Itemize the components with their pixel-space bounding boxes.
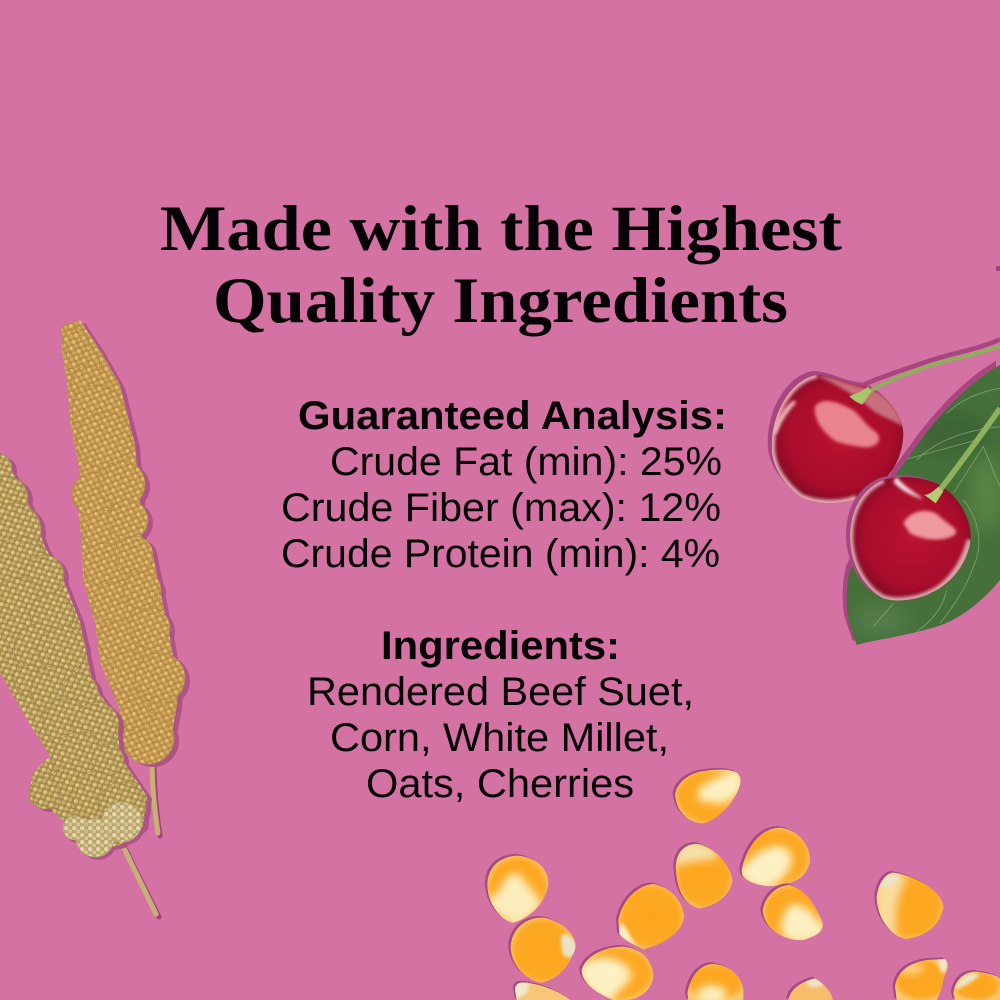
text block: ingredients: Corn, White Millet, [330,716,669,760]
text block: guaranteed analysis: Crude Fat (min): 25% [330,440,722,484]
kernel 14 [513,981,570,1000]
text block: ingredients: Rendered Beef Suet, [307,670,694,714]
image: millet sprays [0,320,190,917]
kernel 5 [616,882,684,949]
image: cherries and leaf [768,339,1000,645]
text block: ingredients: Oats, Cherries [366,762,634,806]
image: corn kernels [485,768,1000,1000]
kernel 2 [485,854,548,927]
kernel 7 [739,826,810,888]
kernel 13 [951,970,1000,1000]
left millet spray stem [120,840,159,917]
kernel 8 [760,883,824,941]
left millet spray [0,452,152,860]
kernel 3 [508,916,577,983]
text block: ingredients [307,624,694,806]
kernel 6 [673,840,732,908]
cherry two [846,475,971,600]
stem shadows [857,339,1000,388]
title: Quality Ingredients [213,265,788,337]
text block: guaranteed analysis: Guaranteed Analysis: [298,394,727,438]
cherry two stem [924,408,1000,503]
cherry one [768,371,903,503]
kernel 10 [685,962,743,1000]
text block: guaranteed analysis: Crude Fiber (max): 12% [281,486,721,530]
right millet spray [61,320,190,767]
kernel 1 [673,768,743,823]
title [160,193,842,337]
text block: guaranteed analysis: Crude Protein (min): 4% [281,532,720,576]
kernel 11 [786,977,833,1000]
right millet spray stem [152,755,160,836]
title: Made with the Highest [160,193,842,265]
mark: small top-right shadow fragment [996,266,1000,271]
leaf [843,361,1000,645]
kernel 12 [893,957,948,1000]
cherry one stem [849,346,1000,405]
kernel 4 [578,945,653,1000]
text block: guaranteed analysis [281,394,727,576]
kernel 9 [874,871,943,942]
text block: ingredients: Ingredients: [381,624,620,668]
